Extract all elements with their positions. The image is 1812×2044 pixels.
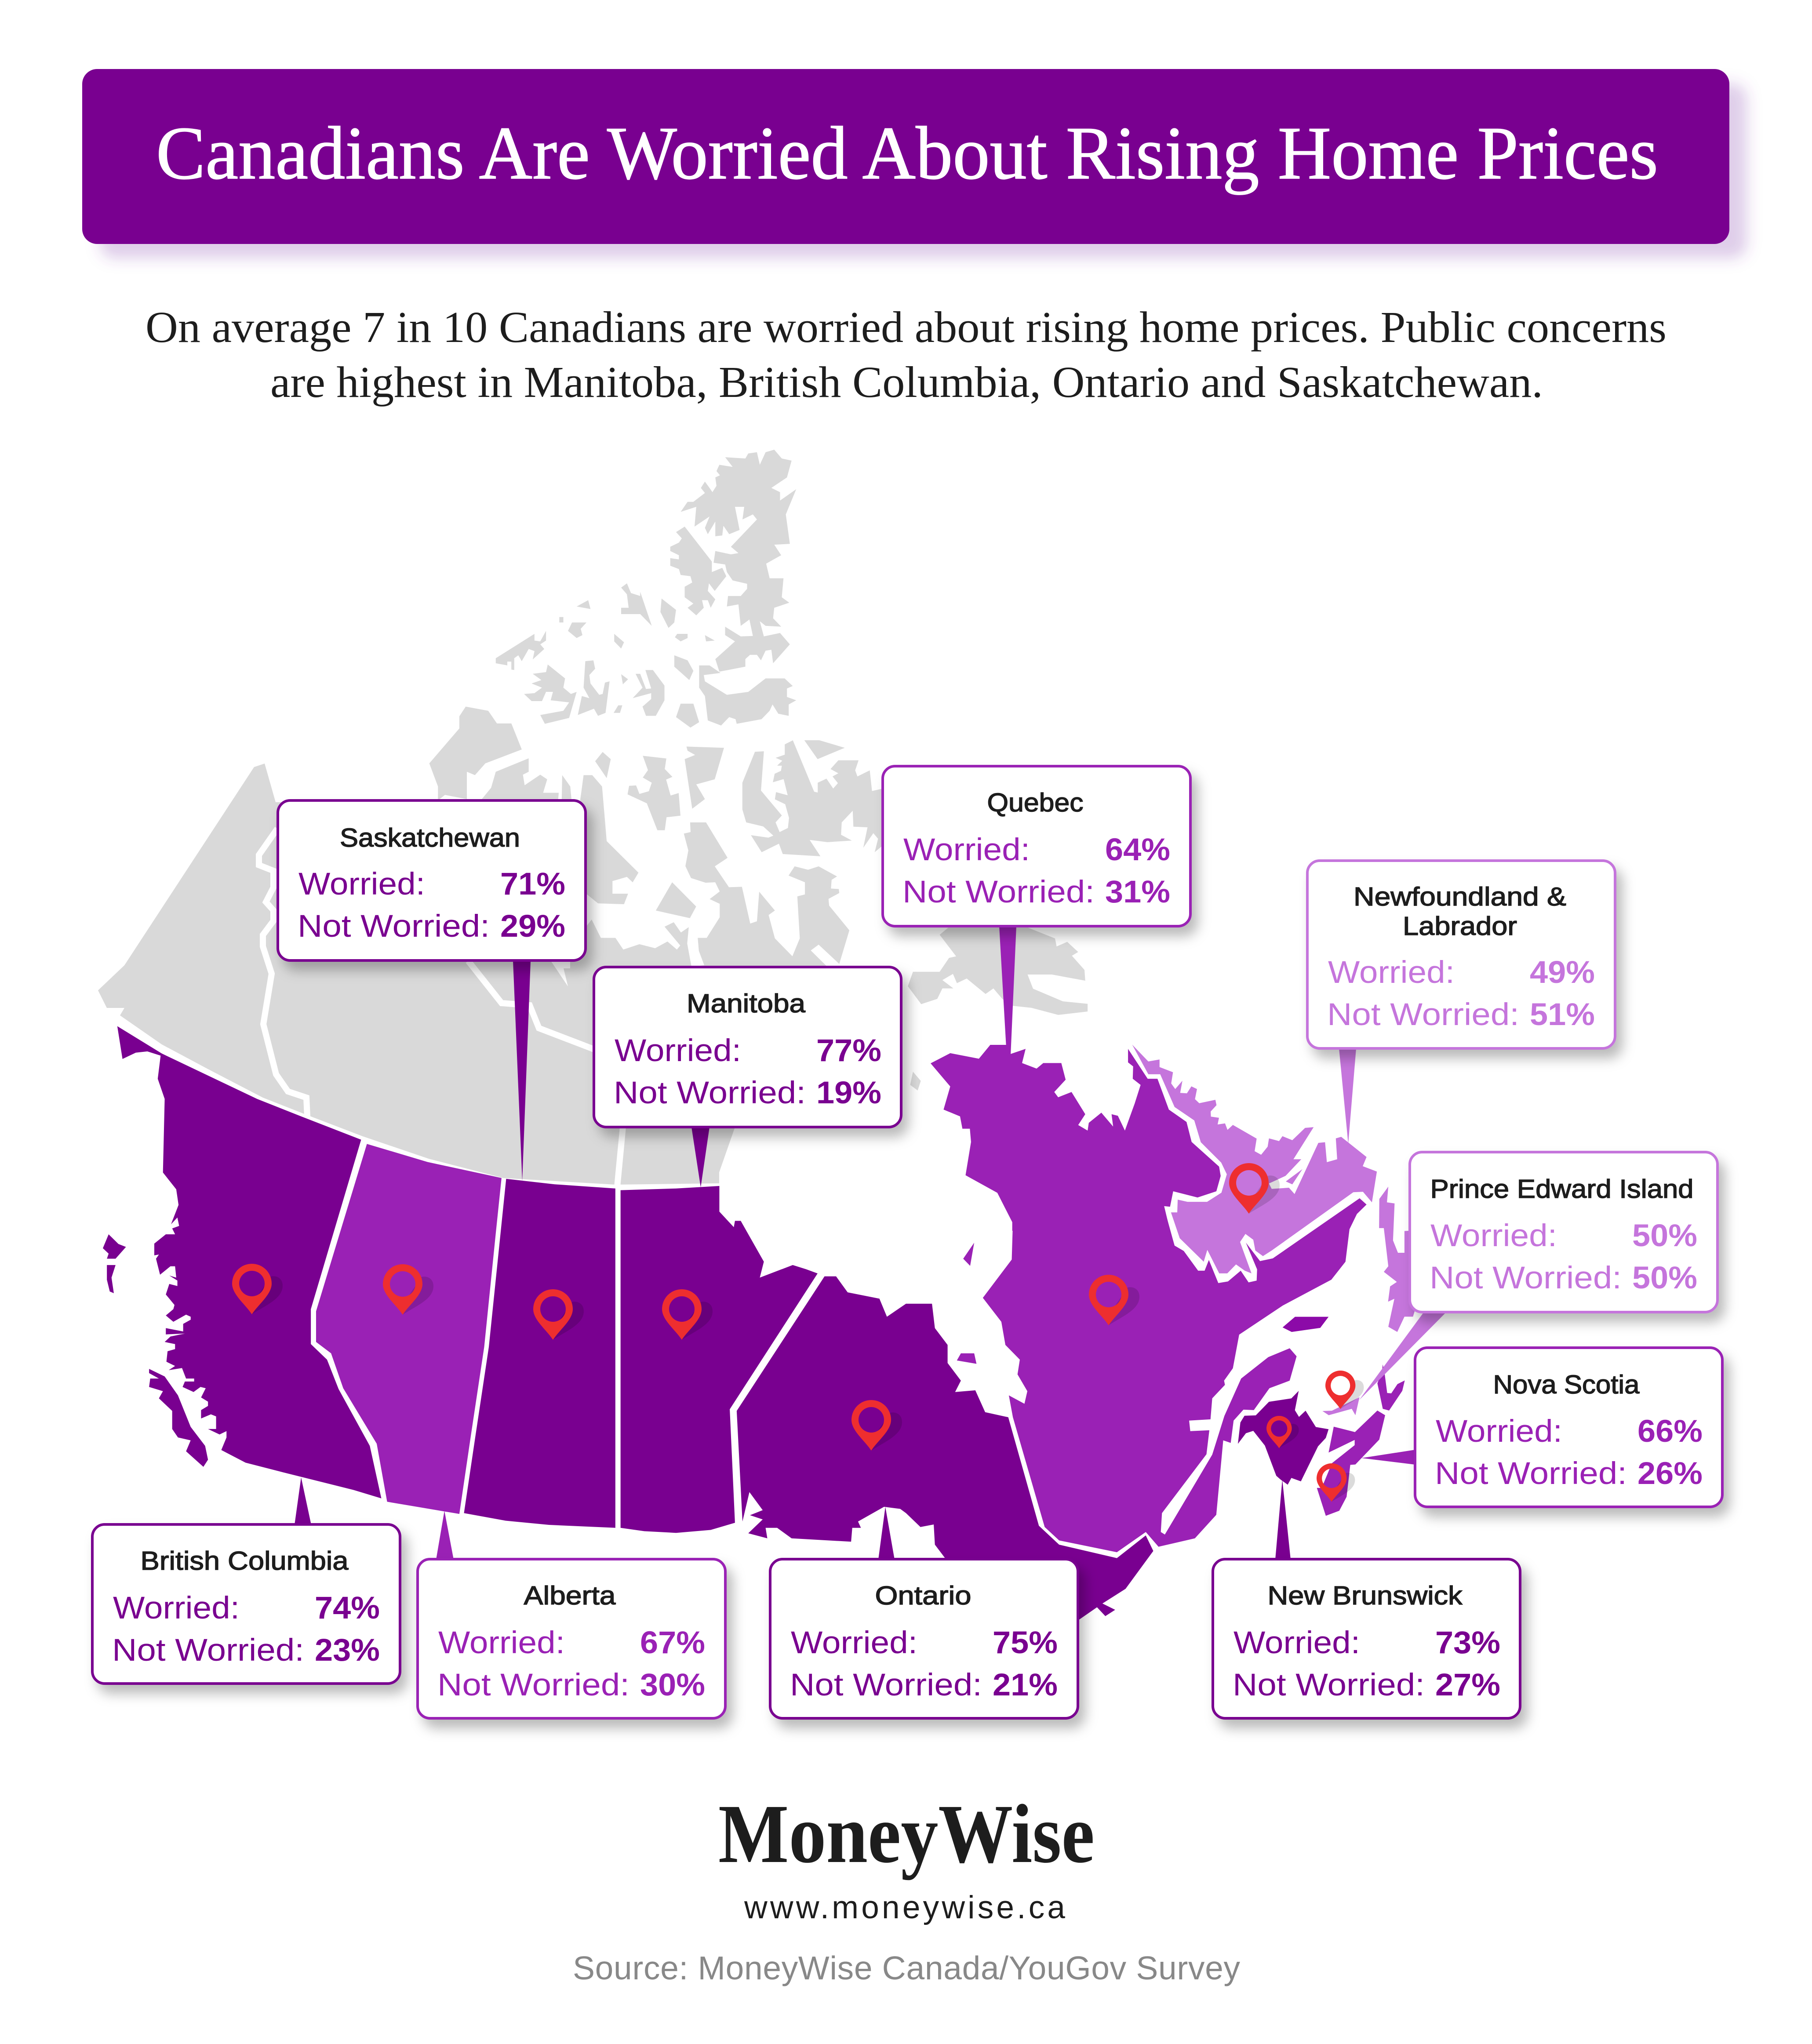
callout: Manitoba: Worried: bbox=[615, 1033, 741, 1068]
callout: Newfoundland and Labrador bbox=[1307, 861, 1615, 1048]
callout: New Brunswick: 73% bbox=[1435, 1626, 1500, 1660]
callout: New Brunswick bbox=[1213, 1559, 1520, 1718]
callout: Ontario: Not Worried: bbox=[790, 1668, 982, 1702]
callout: Manitoba: 77% bbox=[816, 1033, 881, 1068]
province: Manitoba bbox=[621, 1186, 818, 1533]
icon: pin Quebec bbox=[1089, 1275, 1139, 1325]
icon: pin Manitoba bbox=[662, 1289, 713, 1340]
callout: British Columbia bbox=[92, 1524, 400, 1684]
callout: Alberta: Not Worried: bbox=[437, 1668, 629, 1702]
footer logo: MoneyWise: MoneyWise bbox=[718, 1788, 1095, 1880]
callout: Prince Edward Island: Worried: bbox=[1430, 1218, 1557, 1253]
callout: Saskatchewan: Not Worried: bbox=[298, 909, 490, 944]
map: provinces bbox=[103, 1026, 1417, 1620]
callout: Nova Scotia: 66% bbox=[1637, 1414, 1703, 1449]
callout: Saskatchewan: Worried: bbox=[298, 867, 425, 902]
callout: Prince Edward Island: Not Worried: bbox=[1430, 1261, 1622, 1295]
icon: pin Alberta bbox=[383, 1264, 433, 1315]
callout: British Columbia: Not Worried: bbox=[112, 1633, 304, 1668]
callout: Ontario: Worried: bbox=[791, 1626, 917, 1660]
callout: Quebec: Not Worried: bbox=[902, 875, 1095, 909]
callout: Alberta: Worried: bbox=[438, 1626, 565, 1660]
province: Quebec bbox=[931, 1045, 1367, 1552]
source note: Source: MoneyWise Canada/YouGov Survey bbox=[573, 1949, 1241, 1986]
callout: Nova Scotia: Nova Scotia bbox=[1493, 1370, 1640, 1399]
callout: New Brunswick: New Brunswick bbox=[1268, 1581, 1463, 1610]
callout: Saskatchewan: 29% bbox=[500, 909, 565, 944]
province: New Brunswick bbox=[1238, 1391, 1328, 1485]
title banner bbox=[82, 69, 1729, 244]
callout: Quebec: Quebec bbox=[987, 788, 1083, 817]
island: Anticosti bbox=[1283, 1317, 1328, 1332]
callout: Alberta: 67% bbox=[640, 1626, 705, 1660]
intro text: are highest in Manitoba, British Columbia, Ontario and Saskatchewan. bbox=[270, 357, 1543, 407]
icon: pin Newfoundland and Labrador bbox=[1229, 1163, 1280, 1214]
title: Canadians Are Worried About Rising Home Prices bbox=[156, 112, 1658, 195]
icon: pin Saskatchewan bbox=[533, 1289, 584, 1340]
map pins bbox=[232, 1163, 1364, 1502]
map: territory border lines bbox=[259, 829, 623, 1187]
callout: Newfoundland and Labrador: 51% bbox=[1530, 997, 1595, 1032]
province: Prince Edward Island bbox=[1322, 1397, 1360, 1415]
callout: Quebec: 31% bbox=[1105, 875, 1170, 909]
province: Nova Scotia bbox=[1317, 1364, 1405, 1516]
callout: British Columbia: 74% bbox=[315, 1591, 380, 1626]
callout: Alberta: 30% bbox=[640, 1668, 705, 1702]
callout: Prince Edward Island: Prince Edward Island bbox=[1430, 1175, 1693, 1204]
callout: Alberta: Alberta bbox=[524, 1581, 616, 1610]
callout: Newfoundland and Labrador: Not Worried: bbox=[1327, 997, 1519, 1032]
callout: Quebec bbox=[883, 766, 1190, 926]
callout: Ontario bbox=[770, 1559, 1078, 1718]
callout: Newfoundland and Labrador: 49% bbox=[1530, 955, 1595, 990]
callout: Nova Scotia: Worried: bbox=[1436, 1414, 1562, 1449]
callout: British Columbia: 23% bbox=[315, 1633, 380, 1668]
callout: British Columbia: Worried: bbox=[113, 1591, 240, 1626]
icon: pin Prince Edward Island bbox=[1325, 1371, 1364, 1409]
callout: British Columbia: British Columbia bbox=[141, 1546, 349, 1575]
callout: New Brunswick: 27% bbox=[1435, 1668, 1500, 1702]
icon: pin New Brunswick bbox=[1266, 1416, 1299, 1448]
province: Newfoundland and Labrador bbox=[1132, 1045, 1417, 1332]
callout: Manitoba: Manitoba bbox=[687, 989, 805, 1018]
intro text bbox=[146, 302, 1666, 407]
callout: Newfoundland and Labrador: Labrador bbox=[1403, 912, 1517, 941]
callout: Nova Scotia bbox=[1415, 1348, 1722, 1507]
province: Ontario bbox=[737, 1277, 1153, 1620]
icon: pin Nova Scotia bbox=[1317, 1463, 1355, 1502]
province: Alberta bbox=[316, 1144, 502, 1514]
callout: Quebec: Worried: bbox=[903, 833, 1030, 867]
province: British Columbia bbox=[103, 1026, 382, 1498]
callout: New Brunswick: Worried: bbox=[1233, 1626, 1360, 1660]
map: northern territories and arctic islands bbox=[98, 450, 1088, 1185]
icon: pin Ontario bbox=[851, 1400, 902, 1451]
callout: Newfoundland and Labrador: Newfoundland & bbox=[1354, 882, 1566, 911]
callout: Prince Edward Island: 50% bbox=[1632, 1218, 1697, 1253]
callout: Prince Edward Island bbox=[1410, 1152, 1717, 1312]
callout: Nova Scotia: 26% bbox=[1637, 1456, 1703, 1491]
callout: Alberta bbox=[418, 1559, 725, 1718]
province: Saskatchewan bbox=[464, 1179, 615, 1528]
callout: Ontario: 21% bbox=[993, 1668, 1058, 1702]
icon: pin British Columbia bbox=[232, 1264, 283, 1314]
intro text: On average 7 in 10 Canadians are worried about rising home prices. Public concerns bbox=[146, 302, 1666, 352]
callout pointers bbox=[295, 926, 1446, 1560]
callout: Quebec: 64% bbox=[1105, 833, 1170, 867]
callout: New Brunswick: Not Worried: bbox=[1233, 1668, 1425, 1702]
callout: Manitoba bbox=[594, 967, 901, 1127]
callout: Prince Edward Island: 50% bbox=[1632, 1261, 1697, 1295]
callout: Manitoba: Not Worried: bbox=[614, 1076, 806, 1110]
callout: Ontario: 75% bbox=[993, 1626, 1058, 1660]
footer url: www.moneywise.ca bbox=[744, 1890, 1065, 1925]
callout: Ontario: Ontario bbox=[875, 1581, 971, 1610]
callout: Newfoundland and Labrador: Worried: bbox=[1328, 955, 1455, 990]
callout: Saskatchewan bbox=[278, 800, 586, 960]
callout: Saskatchewan: Saskatchewan bbox=[340, 823, 520, 852]
callout: Nova Scotia: Not Worried: bbox=[1435, 1456, 1627, 1491]
callout: Manitoba: 19% bbox=[816, 1076, 881, 1110]
callout: Saskatchewan: 71% bbox=[500, 867, 565, 902]
